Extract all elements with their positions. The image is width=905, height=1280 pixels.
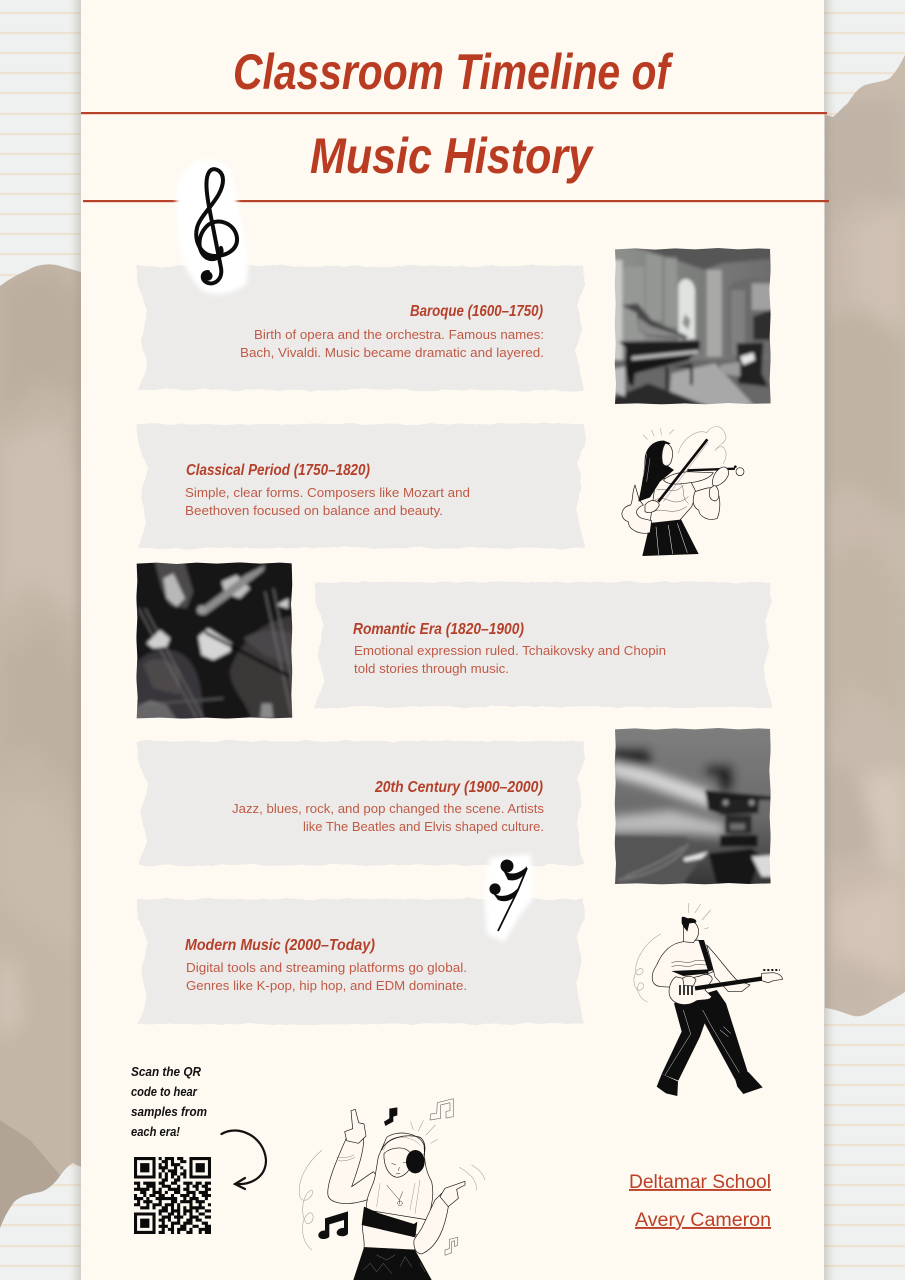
black note bbox=[318, 1211, 348, 1239]
card: Romantic Era bbox=[314, 582, 772, 707]
card: Baroque: Birth of opera and the orchestra. Famous names: bbox=[254, 327, 544, 342]
accent lines bbox=[689, 903, 711, 929]
card: 20th Century bbox=[137, 741, 585, 865]
card: Modern Music bbox=[137, 899, 585, 1024]
right sleeve bbox=[693, 488, 720, 519]
signature: school and teacher bbox=[629, 1172, 771, 1231]
illustration: violin player bbox=[622, 427, 744, 556]
photo: cellos bbox=[136, 562, 292, 719]
motion swirls bbox=[634, 934, 661, 1002]
scan instructions bbox=[131, 1064, 207, 1139]
headphones bbox=[406, 1150, 425, 1173]
scan instructions: samples from bbox=[131, 1104, 207, 1119]
icon: treble clef bbox=[176, 159, 248, 294]
card: Classical Period: Beethoven focused on balance and beauty. bbox=[185, 503, 443, 518]
skirt bbox=[642, 519, 699, 556]
signature: school and teacher: Avery Cameron bbox=[635, 1210, 771, 1231]
face bbox=[662, 443, 673, 466]
card: Baroque bbox=[137, 266, 585, 390]
strap bbox=[698, 940, 713, 972]
icon: curved arrow bbox=[222, 1130, 266, 1189]
face bbox=[384, 1148, 412, 1177]
midriff bbox=[362, 1223, 417, 1250]
card: Romantic Era: Romantic Era (1820–1900) bbox=[353, 621, 524, 638]
icon: musical rest bbox=[484, 854, 534, 942]
card: Baroque: Bach, Vivaldi. Music became dramatic and layered. bbox=[240, 345, 544, 360]
head bbox=[683, 921, 699, 943]
scan instructions: each era! bbox=[131, 1124, 181, 1139]
torso bbox=[652, 940, 713, 987]
scan instructions: code to hear bbox=[131, 1084, 198, 1099]
small black note bbox=[384, 1107, 397, 1126]
title rule lines bbox=[81, 112, 829, 202]
card: Classical Period: Simple, clear forms. Composers like Mozart and bbox=[185, 485, 470, 500]
card: 20th Century: Jazz, blues, rock, and pop changed the scene. Artists bbox=[232, 801, 545, 816]
headstock bbox=[762, 973, 783, 983]
hand bbox=[712, 467, 728, 486]
hair bbox=[366, 1133, 433, 1220]
card: 20th Century: 20th Century (1900–2000) bbox=[374, 779, 543, 796]
guitar neck bbox=[695, 978, 763, 988]
QR code bbox=[134, 1159, 211, 1232]
motion swirls bbox=[678, 427, 726, 463]
card: Modern Music: Genres like K-pop, hip hop, and EDM dominate. bbox=[186, 978, 467, 993]
bow bbox=[658, 439, 707, 502]
hair bbox=[638, 441, 674, 502]
title: Classroom Timeline of bbox=[233, 44, 674, 100]
card: Romantic Era: told stories through music. bbox=[354, 661, 509, 676]
violin body bbox=[663, 472, 713, 484]
raised hand bbox=[345, 1109, 366, 1143]
signature: school and teacher: Deltamar School bbox=[629, 1172, 771, 1193]
card: Classical Period bbox=[137, 424, 585, 548]
torn kraft paper: left bbox=[0, 260, 81, 1235]
card: Modern Music: Modern Music (2000–Today) bbox=[185, 937, 375, 954]
pointing arm bbox=[414, 1193, 448, 1254]
blouse bbox=[650, 478, 697, 523]
raised arm bbox=[328, 1135, 383, 1204]
card: Classical Period: Classical Period (1750–1820) bbox=[186, 462, 370, 479]
pointing hand bbox=[440, 1181, 465, 1207]
outlined note lower bbox=[445, 1237, 458, 1255]
motion swirls bbox=[299, 1150, 322, 1250]
pick-ups bbox=[680, 985, 692, 995]
crop top bbox=[362, 1207, 417, 1237]
left hand bbox=[683, 976, 696, 986]
torn kraft paper: right bbox=[824, 50, 905, 1020]
card: 20th Century: like The Beatles and Elvis shaped culture. bbox=[303, 819, 544, 834]
card: Modern Music: Digital tools and streaming platforms go global. bbox=[186, 960, 467, 975]
necklace bbox=[387, 1185, 403, 1204]
outlined note top bbox=[430, 1099, 453, 1120]
card: Romantic Era: Emotional expression ruled. Tchaikovsky and Chopin bbox=[354, 643, 666, 658]
pants bbox=[662, 990, 748, 1081]
shoes bbox=[657, 1074, 678, 1096]
left sleeve bbox=[622, 485, 652, 533]
photo: piano room bbox=[614, 248, 771, 404]
front hand bbox=[645, 501, 659, 513]
illustration: dancing girl with headphones bbox=[299, 1099, 485, 1280]
illustration: guitarist bbox=[634, 903, 783, 1096]
title bbox=[233, 44, 674, 184]
card: Baroque: Baroque (1600–1750) bbox=[410, 303, 543, 320]
title: Music History bbox=[310, 128, 594, 184]
right arm bbox=[707, 945, 750, 992]
guitar body bbox=[669, 974, 712, 1005]
scan instructions: Scan the QR bbox=[131, 1064, 202, 1079]
skirt bbox=[353, 1247, 432, 1280]
violin neck and scroll bbox=[687, 469, 735, 470]
photo: turntable bbox=[614, 728, 771, 884]
